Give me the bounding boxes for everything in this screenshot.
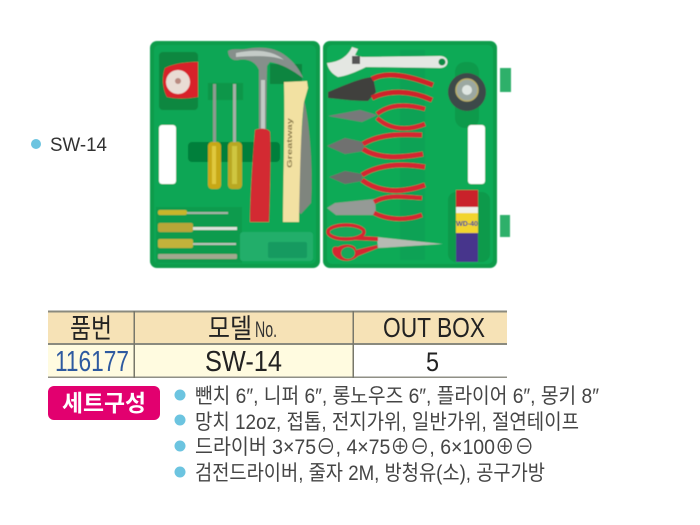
tool case photo: [150, 41, 511, 268]
icon: pruning shears: [328, 75, 433, 101]
bullet: [174, 414, 186, 426]
icon: WD-40 spray can: WD-40: [456, 221, 478, 228]
model label: [31, 135, 107, 156]
icon: slip joint pliers: [327, 197, 422, 219]
bullet: [174, 466, 186, 478]
icon: folding saw: Greatway: [287, 118, 294, 168]
icon: folding saw: [283, 81, 312, 222]
icon: tape measure: [163, 62, 198, 98]
set contents badge: 세트구성: [62, 390, 146, 416]
bullet: [31, 139, 41, 149]
icon: tape roll: [448, 73, 486, 111]
line 2: 망치 12oz, 접톱, 전지가위, 일반가위, 절연테이프: [195, 411, 579, 434]
cell: quantity: 5: [426, 347, 439, 377]
header: model: 모델: [208, 314, 252, 344]
handle cutout: [468, 125, 485, 184]
line 1: 뺀치 6″, 니퍼 6″, 롱노우즈 6″, 플라이어 6″, 몽키 8″: [195, 385, 600, 408]
set contents badge: [48, 386, 160, 420]
icon: scissors: [328, 225, 443, 261]
icon: WD-40 spray can: [456, 190, 478, 262]
table: [48, 310, 507, 378]
cell: model: SW-14: [205, 346, 282, 378]
header: No.: No.: [255, 317, 277, 342]
icon: small screwdrivers: [158, 210, 237, 259]
header: item number: 품번: [70, 314, 112, 344]
line 3: 드라이버 3×75⊖, 4×75⊕⊖, 6×100⊕⊖: [195, 436, 534, 459]
icon: side cutters: [329, 165, 425, 191]
icon: screwdriver: [208, 84, 221, 189]
row band: [48, 345, 353, 377]
set contents list: [174, 385, 600, 485]
bullet: [174, 440, 186, 452]
handle cutout: [159, 125, 176, 184]
header: out box: OUT BOX: [383, 312, 485, 343]
icon: hammer: [228, 48, 303, 222]
header band: [48, 312, 507, 344]
model name: SW-14: [50, 135, 107, 156]
bullet: [174, 390, 186, 400]
latches: [500, 68, 511, 92]
cell: item number: 116177: [55, 346, 129, 378]
icon: long nose pliers: [328, 106, 425, 128]
icon: pliers: [327, 135, 423, 157]
panel: left case half: [150, 41, 320, 268]
panel: right case half: [323, 41, 511, 268]
line 4: 검전드라이버, 줄자 2M, 방청유(소), 공구가방: [195, 462, 545, 485]
icon: screwdriver: [228, 84, 242, 189]
icon: adjustable wrench: [327, 47, 448, 77]
